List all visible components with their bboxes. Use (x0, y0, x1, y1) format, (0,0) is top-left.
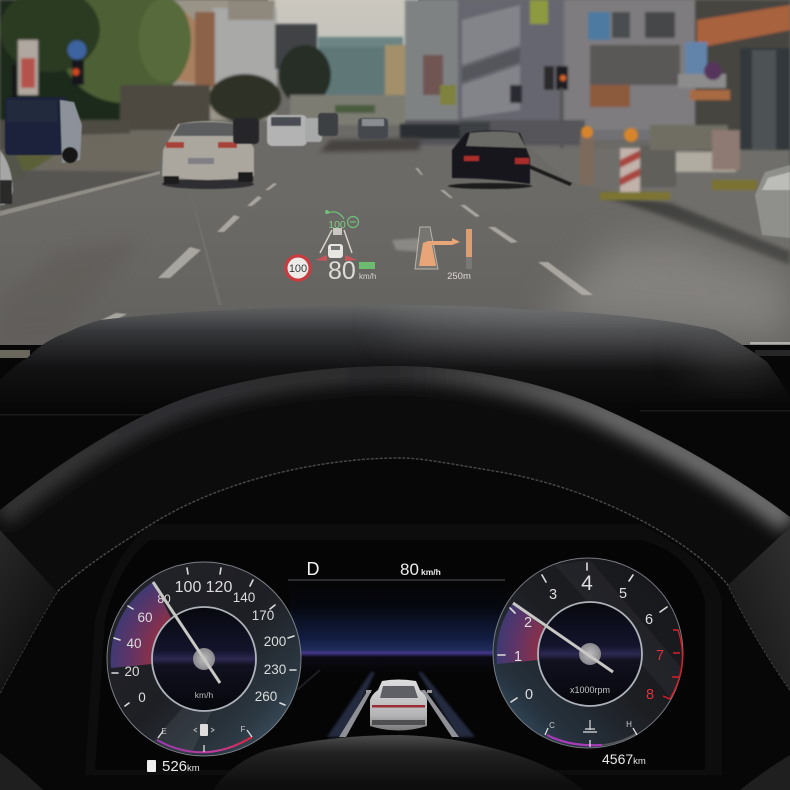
temperature gauge: C (549, 721, 555, 730)
right tachometer (493, 558, 700, 748)
right spoke (728, 527, 790, 690)
hud: green cruise icons: 100 (328, 219, 346, 231)
fuel gauge (157, 724, 252, 752)
traffic ahead (233, 118, 259, 144)
parked cars (400, 124, 460, 139)
head-up display (284, 211, 472, 285)
left spoke (0, 530, 57, 693)
speedometer numerals: 200 (264, 634, 286, 649)
windshield reflection (190, 190, 222, 305)
speedometer numerals: km/h (195, 690, 213, 700)
speedometer numerals (124, 579, 286, 705)
hud: green cruise icons (326, 211, 358, 231)
tachometer tick marks (498, 563, 667, 702)
hud: speed limit sign (284, 254, 312, 282)
tachometer numerals: 4 (581, 572, 593, 595)
odometer readout: 4567km (602, 751, 646, 767)
right edge car (755, 165, 790, 238)
fuel gauge: F (241, 725, 246, 734)
parked van (5, 97, 67, 155)
lane markings (97, 168, 593, 322)
speedometer numerals: 140 (233, 590, 255, 605)
gear indicator: D (306, 559, 320, 579)
tachometer numerals: 6 (645, 612, 653, 628)
speedometer tick marks (112, 568, 296, 706)
temperature gauge (545, 720, 637, 747)
fuel gauge: E (161, 727, 167, 736)
tachometer numerals: 8 (646, 687, 654, 703)
tachometer numerals (514, 572, 664, 703)
pavements (40, 132, 165, 195)
street scene through windshield (0, 0, 790, 365)
speedometer numerals: 230 (264, 662, 286, 677)
hud: speed readout: 80 (328, 257, 356, 285)
hud: navigation arrow: 250m (447, 271, 471, 282)
speedometer numerals: 20 (124, 664, 140, 679)
range readout: 526km (162, 758, 200, 775)
tachometer numerals: 7 (656, 648, 664, 664)
rim stitching (0, 458, 790, 693)
speedometer numerals: 60 (137, 610, 153, 625)
cars on the road (0, 97, 790, 238)
tachometer numerals: 5 (619, 586, 627, 602)
hud: speed readout (328, 257, 376, 285)
speedometer numerals: 170 (252, 608, 274, 623)
tachometer numerals: 2 (524, 615, 532, 631)
dark car on right (448, 183, 532, 189)
dashboard (0, 305, 790, 416)
tachometer red zone (663, 630, 682, 699)
silver lead car (162, 179, 254, 189)
speedometer needle (193, 648, 215, 670)
digital speed: km/h (421, 567, 441, 577)
tachometer numerals: 3 (549, 587, 557, 603)
hud: speed limit sign: 100 (289, 263, 307, 275)
building window rows (462, 5, 520, 118)
steering wheel rim (0, 366, 790, 790)
speedometer numerals: 80 (157, 592, 171, 606)
left speedometer (107, 562, 301, 756)
hud: speed readout: km/h (359, 272, 376, 281)
temperature gauge: H (626, 720, 632, 729)
wheel hub (213, 735, 583, 790)
road haze on windshield (540, 240, 790, 340)
construction site (580, 125, 757, 200)
digital speed (400, 560, 441, 579)
speedometer numerals: 120 (206, 579, 232, 596)
left edge car (0, 150, 13, 205)
hud: lane assist car graphic (315, 228, 357, 261)
hud: navigation arrow (392, 227, 472, 282)
traffic pole and signs (18, 40, 38, 95)
digital speed: 80 (400, 560, 419, 579)
tachometer numerals: 0 (525, 687, 533, 703)
tachometer numerals: x1000rpm (570, 685, 610, 695)
instrument cluster screen (106, 558, 684, 772)
speedometer numerals: 40 (126, 636, 142, 651)
tachometer needle (579, 643, 601, 665)
speedometer numerals: 260 (255, 689, 277, 704)
right buildings (400, 0, 790, 170)
road with car graphic (297, 670, 475, 737)
sky (268, 0, 418, 50)
wheel lower rim (0, 753, 43, 790)
left buildings and trees (0, 0, 420, 150)
clipped trip readout: 20 (245, 759, 261, 775)
speedometer numerals: 100 (175, 579, 201, 596)
speedometer numerals: 0 (138, 690, 146, 705)
tachometer numerals: 1 (514, 649, 522, 665)
